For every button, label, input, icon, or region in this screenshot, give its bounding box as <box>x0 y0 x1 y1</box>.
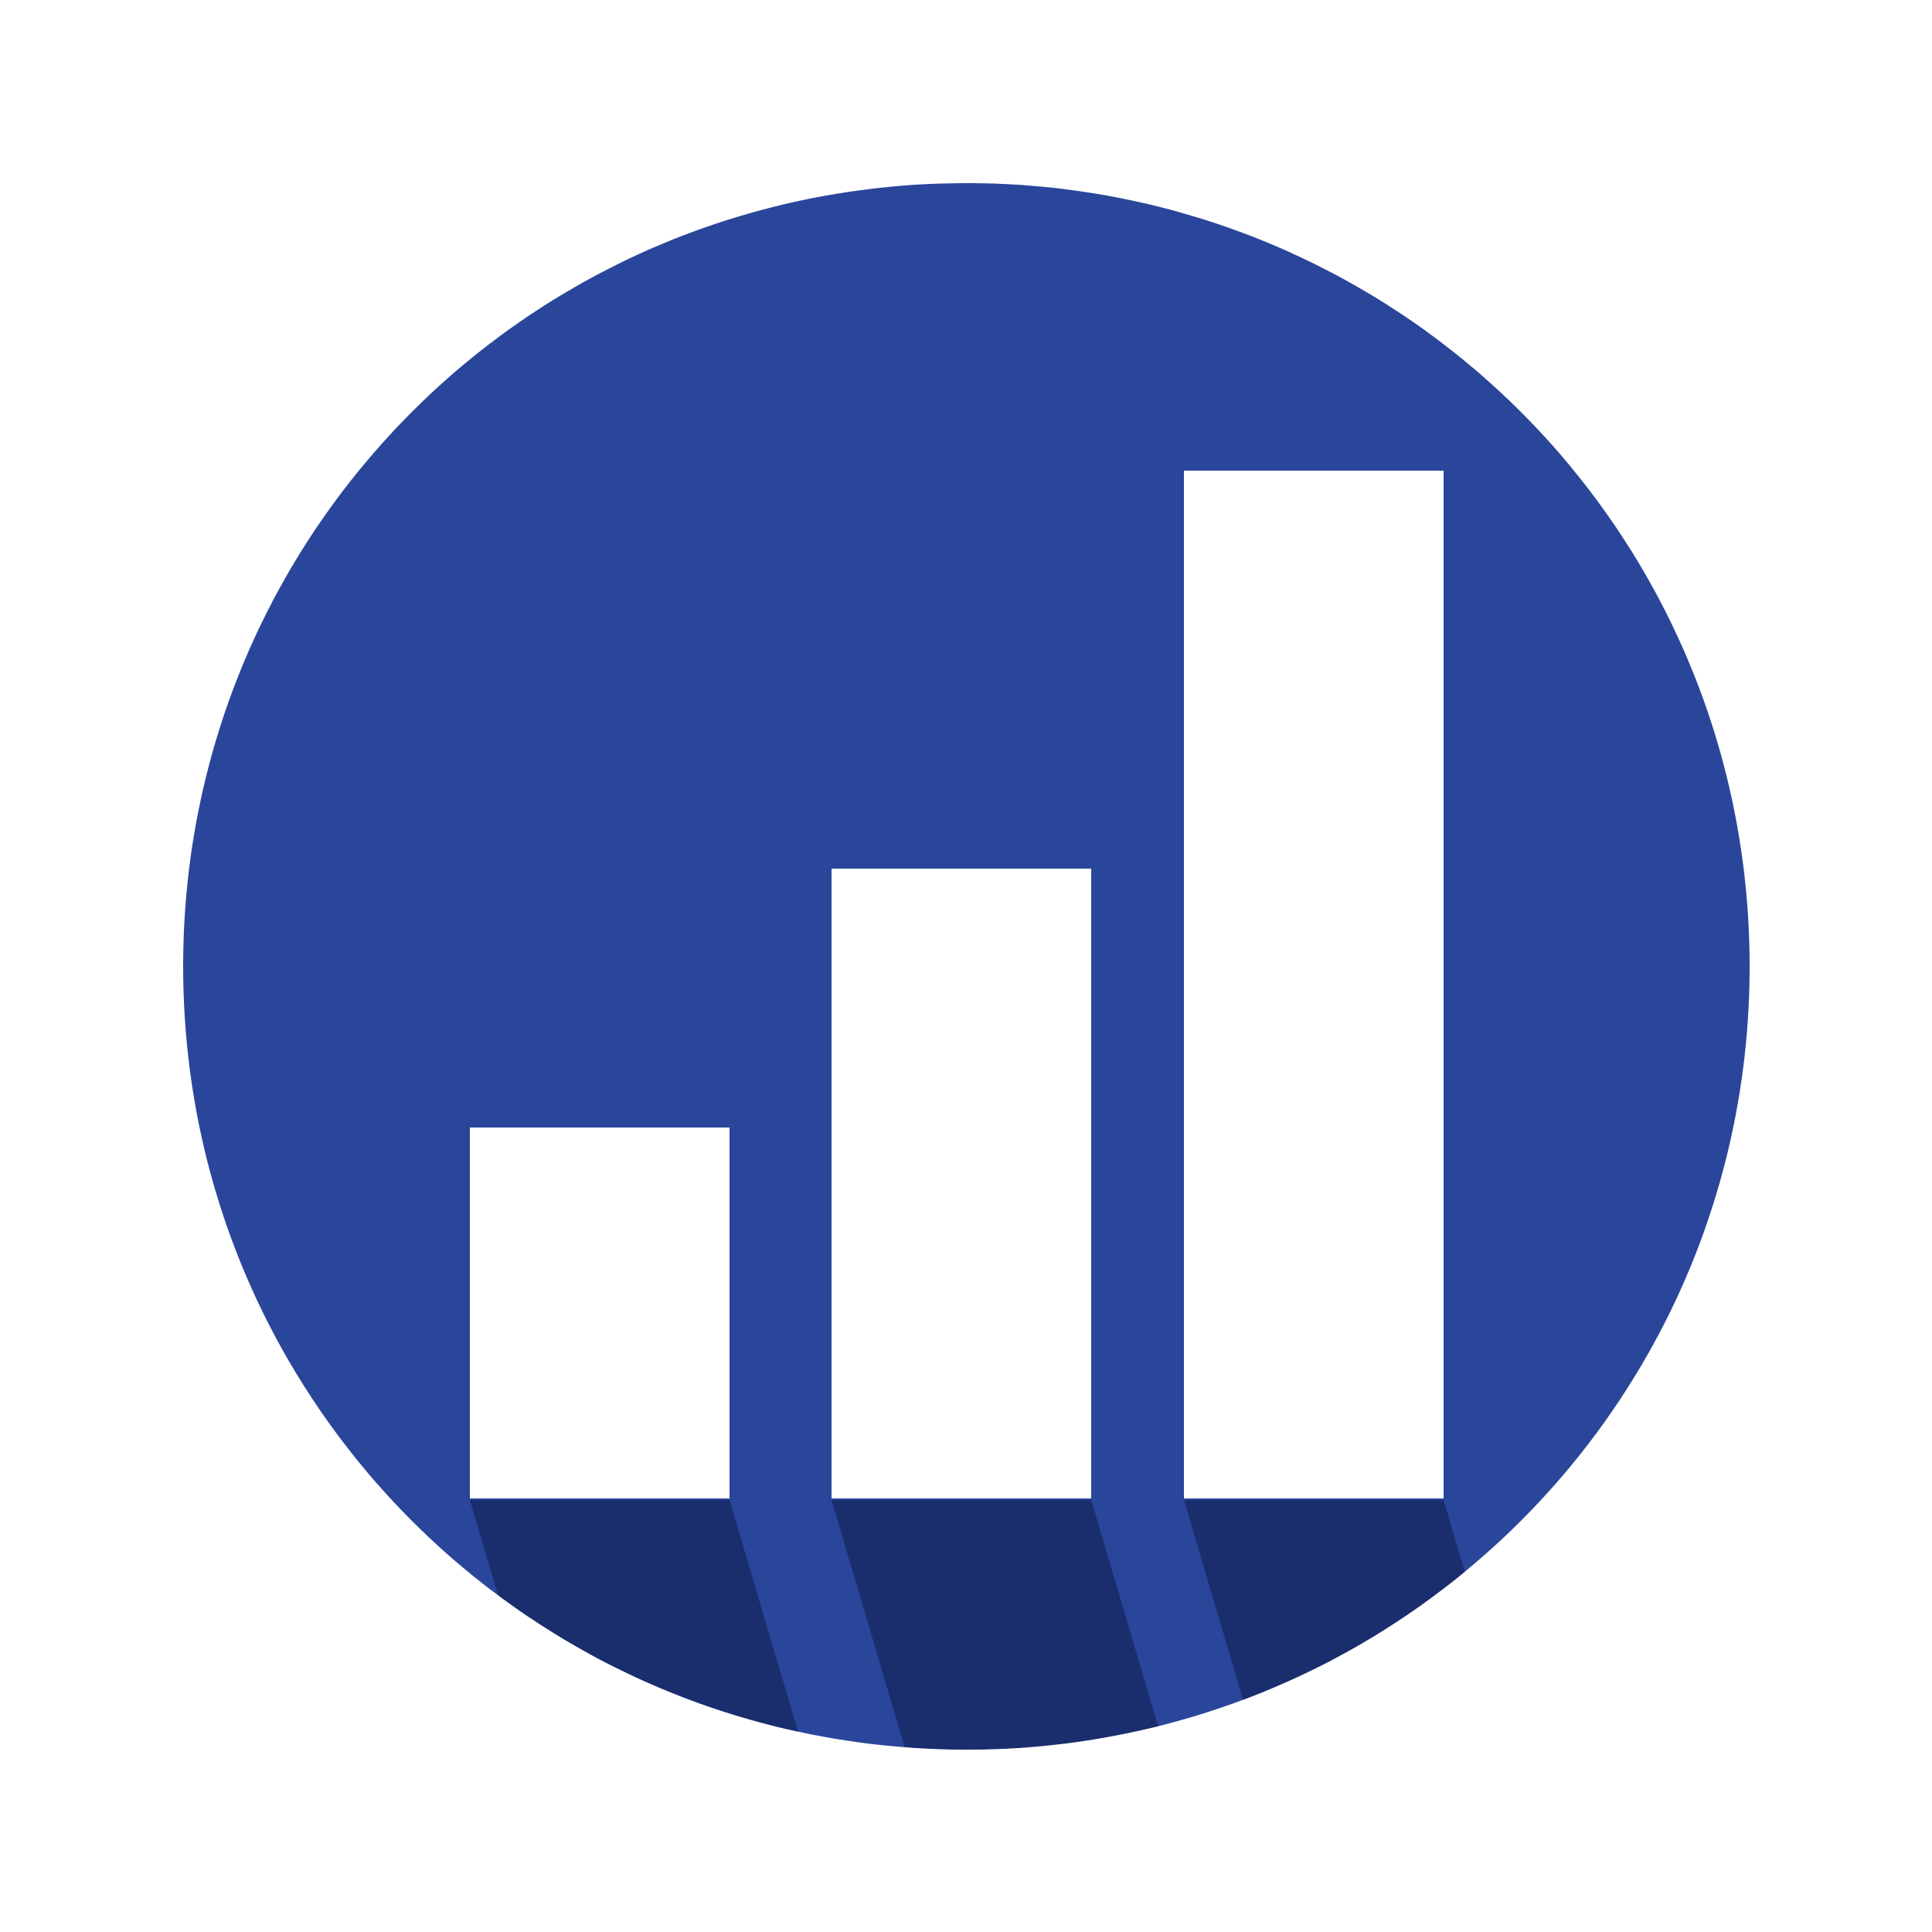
bar: short <box>470 1128 730 1498</box>
shadow: short bar <box>470 1500 798 1732</box>
bar shadows <box>470 1500 1465 1750</box>
circle background <box>183 183 1750 1750</box>
shadow: medium bar <box>832 1500 1158 1750</box>
icon: bar chart badge <box>183 183 1750 1809</box>
bar: tall <box>1184 471 1444 1498</box>
shadow: tall bar <box>1184 1500 1465 1700</box>
bar: medium <box>832 869 1091 1498</box>
bars <box>470 471 1444 1498</box>
